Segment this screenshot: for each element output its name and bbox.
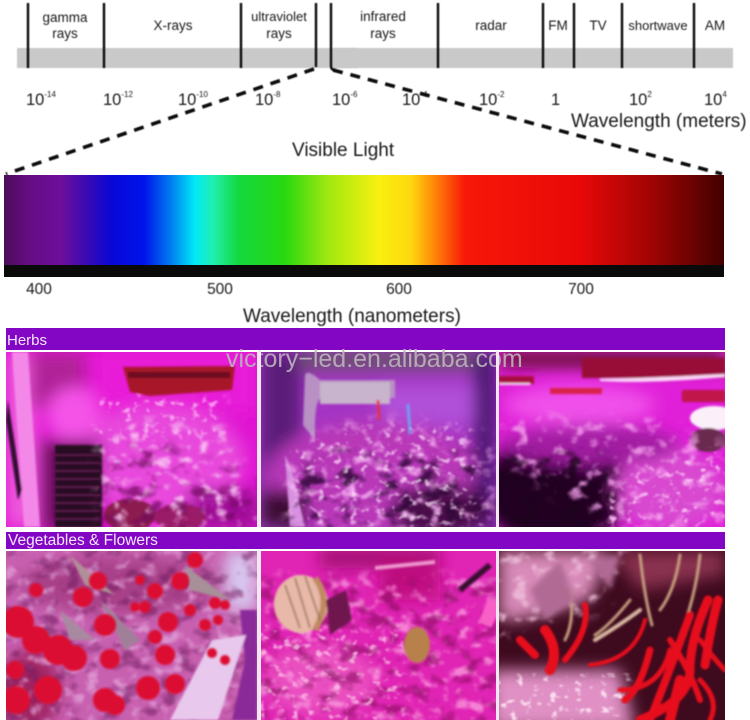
band labels: FM [548, 18, 568, 33]
visible spectrum bar [4, 175, 724, 277]
header bar: herbs: Herbs [7, 332, 47, 349]
heading: visible light: Visible Light [292, 140, 395, 161]
nanometer scale [26, 281, 594, 298]
band labels: X-rays [153, 18, 193, 33]
header bar: vegetables and flowers: Vegetables & Flowers [8, 532, 158, 549]
nanometer scale: 700 [568, 281, 594, 298]
wavelength scale in meters: 4 [722, 90, 727, 99]
wavelength scale in meters: 10 [479, 91, 497, 109]
band labels: gamma [42, 10, 88, 25]
wavelength scale in meters: -6 [350, 90, 358, 99]
band labels: rays [266, 26, 292, 41]
wavelength scale in meters: 10 [255, 91, 273, 109]
photo: herbs under light [261, 350, 496, 540]
photo: herbs grow room [499, 352, 725, 527]
wavelength scale in meters: 10 [103, 91, 121, 109]
axis label: wavelength nanometers: Wavelength (nanometers) [243, 306, 461, 327]
photo: red chili peppers [490, 545, 725, 720]
wavelength scale in meters: 10 [26, 91, 44, 109]
header bar: vegetables and flowers [6, 532, 725, 549]
nanometer scale: 500 [207, 281, 233, 298]
photo: herbs in tent [6, 352, 260, 531]
nanometer scale: 600 [386, 281, 412, 298]
band labels: rays [52, 26, 78, 41]
wavelength scale in meters: -8 [273, 90, 281, 99]
header bar: herbs [6, 328, 725, 350]
band labels: ultraviolet [251, 9, 307, 24]
watermark: victory−led.en.alibaba.com [226, 345, 523, 373]
wavelength scale in meters: 2 [647, 90, 652, 99]
wavelength scale in meters: -10 [196, 90, 208, 99]
wavelength scale in meters: -12 [121, 90, 133, 99]
electromagnetic spectrum band [17, 3, 733, 70]
wavelength scale in meters: 10 [402, 91, 420, 109]
band labels: AM [705, 18, 725, 33]
wavelength scale in meters: 10 [332, 91, 350, 109]
wavelength scale in meters: 10 [178, 91, 196, 109]
photo: tomatoes [0, 545, 262, 720]
axis label: wavelength meters: Wavelength (meters) [571, 111, 747, 132]
wavelength scale in meters: -14 [44, 90, 56, 99]
nanometer scale: 400 [26, 281, 52, 298]
band labels: infrared [360, 9, 406, 24]
wavelength scale in meters: 10 [629, 91, 647, 109]
band labels: radar [475, 18, 507, 33]
wavelength scale in meters: 10 [704, 91, 722, 109]
dashed zoom lines [6, 69, 722, 174]
band labels [42, 9, 725, 41]
band labels: TV [589, 18, 607, 33]
band labels: shortwave [628, 18, 688, 33]
photo: melons [255, 548, 502, 720]
wavelength scale in meters [26, 90, 727, 109]
wavelength scale in meters: -4 [420, 90, 428, 99]
band labels: rays [370, 26, 396, 41]
wavelength scale in meters: -2 [497, 90, 505, 99]
wavelength scale in meters: 1 [551, 91, 560, 109]
photo gutters [257, 351, 499, 720]
